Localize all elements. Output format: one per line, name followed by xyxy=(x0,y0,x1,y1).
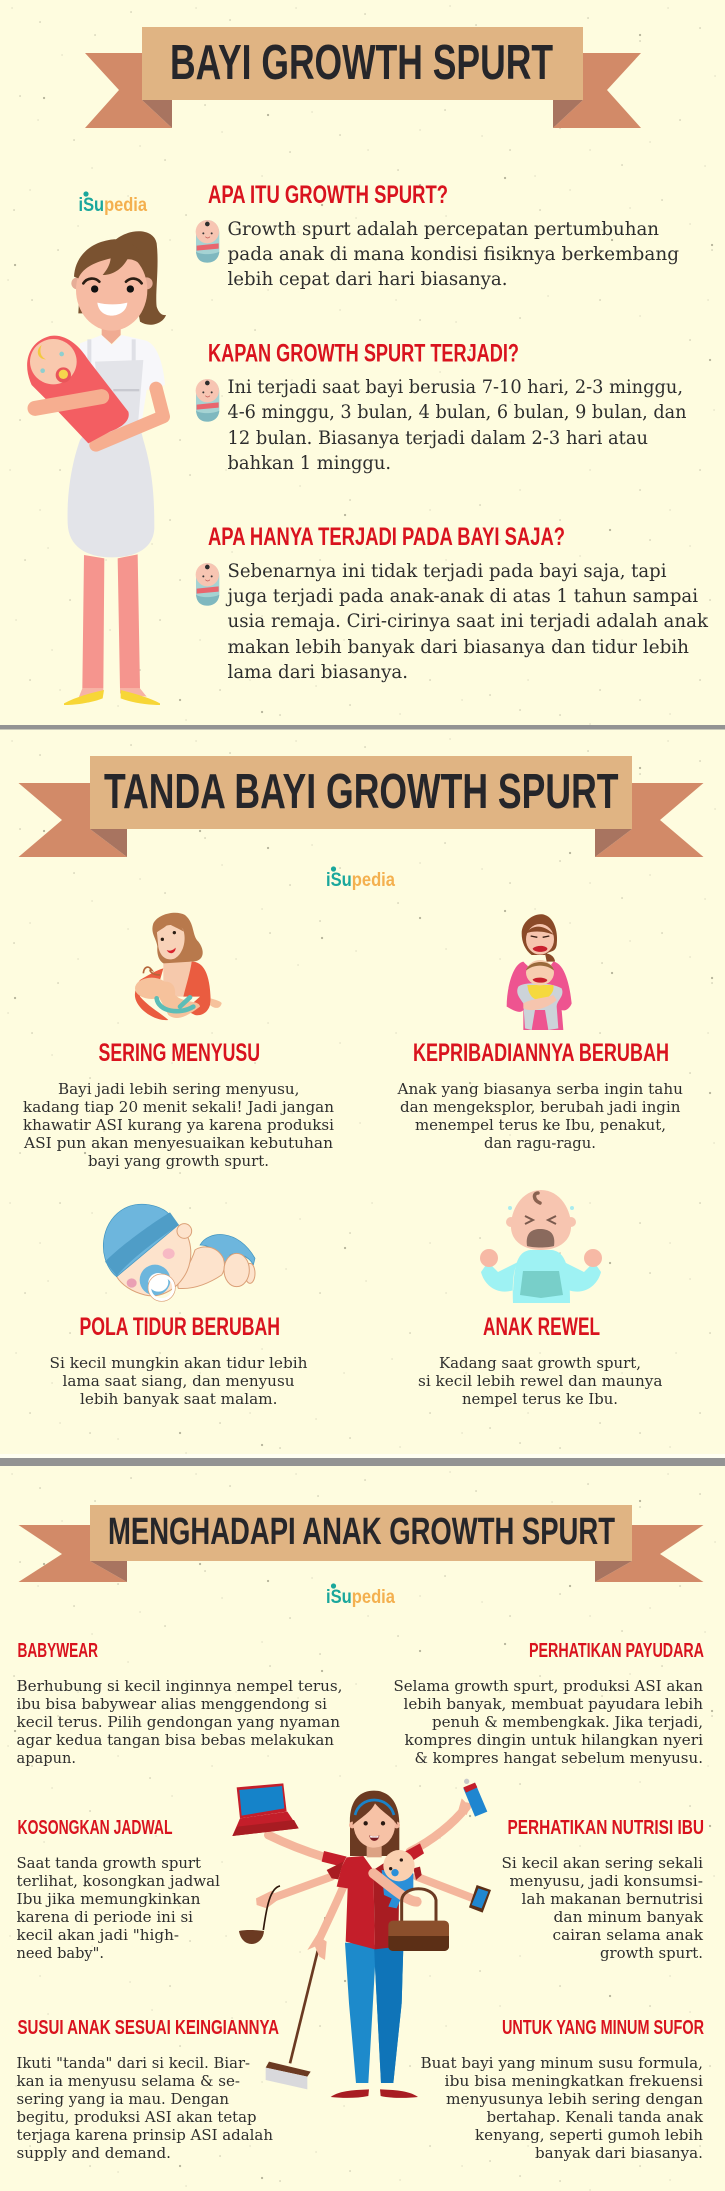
text block: perhatikan payudara: Selama growth spurt, produksi ASI akan xyxy=(394,1677,703,1695)
text block: kosongkan jadwal: karena di periode ini si xyxy=(16,1908,193,1926)
text block: sering menyusu: Bayi jadi lebih sering menyusu, xyxy=(58,1080,300,1098)
text block: babywear: Berhubung si kecil inginnya nempel terus, xyxy=(16,1677,342,1695)
heading: apa itu growth spurt: APA ITU GROWTH SPURT? xyxy=(208,181,448,209)
text block: untuk yang minum sufor: Buat bayi yang minum susu formula, xyxy=(420,2054,703,2072)
text block: perhatikan payudara: kompres dingin untuk hilangkan nyeri xyxy=(404,1731,703,1749)
heading: anak rewel: ANAK REWEL xyxy=(483,1313,600,1341)
text block: when it happens: bahkan 1 minggu. xyxy=(228,452,391,474)
text block: perhatikan nutrisi ibu xyxy=(502,1854,704,1962)
text block: perhatikan nutrisi ibu: Si kecil akan sering sekali xyxy=(502,1854,703,1872)
heading: babywear: BABYWEAR xyxy=(18,1640,98,1662)
heading: sering menyusu: SERING MENYUSU xyxy=(98,1039,260,1067)
text block: not only babies: juga terjadi pada anak-anak di atas 1 tahun sampai xyxy=(226,585,698,607)
text block: pola tidur berubah: lama saat siang, dan menyusu xyxy=(62,1372,295,1390)
text block: anak rewel xyxy=(418,1354,663,1408)
text block: growth spurt definition: pada anak di mana kondisi fisiknya berkembang xyxy=(228,243,679,265)
icon: swaddled baby bullet 3 xyxy=(196,563,219,606)
heading: pola tidur berubah: POLA TIDUR BERUBAH xyxy=(80,1313,280,1341)
text block: growth spurt definition: lebih cepat dari hari biasanya. xyxy=(228,268,508,290)
heading: apa hanya terjadi pada bayi saja: APA HANYA TERJADI PADA BAYI SAJA? xyxy=(208,523,565,551)
text block: susui anak sesuai keinginannya: sering yang ia mau. Dengan xyxy=(16,2090,229,2108)
panel: apa itu growth spurt xyxy=(27,27,708,705)
text block: susui anak sesuai keinginannya: terjaga karena prinsip ASI adalah xyxy=(16,2126,273,2144)
text block: kepribadiannya berubah: dan mengeksplor, berubah jadi ingin xyxy=(400,1098,681,1116)
text block: not only babies: makan lebih banyak dari biasanya dan tidur lebih xyxy=(228,636,689,658)
text block: not only babies xyxy=(226,560,708,683)
text block: not only babies: Sebenarnya ini tidak terjadi pada bayi saja, tapi xyxy=(228,560,666,582)
text block: when it happens: 4-6 minggu, 3 bulan, 4 bulan, 6 bulan, 9 bulan, dan xyxy=(228,401,686,423)
panel: tanda bayi growth spurt xyxy=(18,756,704,1408)
text block: perhatikan nutrisi ibu: dan minum banyak xyxy=(554,1908,704,1926)
heading: kapan growth spurt terjadi: KAPAN GROWTH SPURT TERJADI? xyxy=(208,340,519,368)
heading: kosongkan jadwal: KOSONGKAN JADWAL xyxy=(18,1817,172,1839)
text block: kosongkan jadwal: terlihat, kosongkan jadwal xyxy=(16,1872,220,1890)
text block: susui anak sesuai keinginannya: kan ia menyusu selama & se- xyxy=(16,2072,240,2090)
text block: kosongkan jadwal: Ibu jika memungkinkan xyxy=(16,1890,201,1908)
text block: kosongkan jadwal xyxy=(16,1854,220,1962)
text block: kosongkan jadwal: need baby". xyxy=(16,1944,104,1962)
banner: bayi growth spurt: BAYI GROWTH SPURT xyxy=(170,36,553,90)
illustration: crying baby xyxy=(480,1190,602,1303)
text block: babywear: agar kedua tangan bisa bebas melakukan xyxy=(16,1731,334,1749)
text block: susui anak sesuai keinginannya xyxy=(16,2054,273,2162)
text block: kosongkan jadwal: kecil akan jadi "high- xyxy=(16,1926,179,1944)
text block: anak rewel: si kecil lebih rewel dan maunya xyxy=(418,1372,663,1390)
text block: kepribadiannya berubah: menempel terus ke Ibu, penakut, xyxy=(415,1116,666,1134)
text block: anak rewel: Kadang saat growth spurt, xyxy=(439,1354,641,1372)
text block: perhatikan nutrisi ibu: cairan selama anak xyxy=(552,1926,704,1944)
banner: menghadapi anak growth spurt xyxy=(18,1505,704,1582)
text block: sering menyusu: bayi yang growth spurt. xyxy=(88,1152,269,1170)
text block: not only babies: usia remaja. Ciri-cirinya saat ini terjadi adalah anak xyxy=(228,610,708,632)
text block: babywear: kecil terus. Pilih gendongan yang nyaman xyxy=(16,1713,340,1731)
logo: isupedia: iSupedia xyxy=(326,870,395,891)
text block: sering menyusu: kadang tiap 20 menit sekali! Jadi jangan xyxy=(23,1098,334,1116)
text block: susui anak sesuai keinginannya: supply and demand. xyxy=(16,2144,171,2162)
text block: perhatikan nutrisi ibu: growth spurt. xyxy=(600,1944,703,1962)
text block: growth spurt definition xyxy=(228,218,679,290)
text block: kepribadiannya berubah xyxy=(396,1080,683,1152)
text block: untuk yang minum sufor: bertahap. Kenali tanda anak xyxy=(486,2108,704,2126)
text block: not only babies: lama dari biasanya. xyxy=(228,661,408,683)
text block: untuk yang minum sufor: kenyang, seperti gumoh lebih xyxy=(475,2126,703,2144)
text block: when it happens xyxy=(228,376,686,474)
banner: tanda bayi growth spurt xyxy=(18,756,704,857)
icon: swaddled baby bullet 1 xyxy=(196,220,219,263)
text block: when it happens: 12 bulan. Biasanya terjadi dalam 2-3 hari atau xyxy=(228,427,648,449)
text block: growth spurt definition: Growth spurt adalah percepatan pertumbuhan xyxy=(228,218,659,240)
text block: anak rewel: nempel terus ke Ibu. xyxy=(462,1390,618,1408)
icon: swaddled baby bullet 2 xyxy=(196,379,219,422)
text block: untuk yang minum sufor xyxy=(420,2054,704,2162)
text block: kepribadiannya berubah: dan ragu-ragu. xyxy=(484,1134,596,1152)
text block: kepribadiannya berubah: Anak yang biasanya serba ingin tahu xyxy=(396,1080,683,1098)
text block: pola tidur berubah: Si kecil mungkin akan tidur lebih xyxy=(50,1354,308,1372)
text block: perhatikan payudara: lebih banyak, membuat payudara lebih xyxy=(404,1695,703,1713)
logo: isupedia: iSupedia xyxy=(78,195,147,216)
text block: untuk yang minum sufor: ibu bisa meningkatkan frekuensi xyxy=(444,2072,703,2090)
text block: sering menyusu: ASI pun akan menyesuaikan kebutuhan xyxy=(23,1134,333,1152)
illustration: mother breastfeeding xyxy=(135,913,222,1020)
text block: perhatikan nutrisi ibu: menyusu, jadi konsumsi- xyxy=(510,1872,703,1890)
banner: bayi growth spurt xyxy=(85,27,641,128)
text block: untuk yang minum sufor: banyak dari biasanya. xyxy=(535,2144,703,2162)
text block: sering menyusu xyxy=(23,1080,334,1170)
text block: untuk yang minum sufor: menyusunya lebih sering dengan xyxy=(446,2090,703,2108)
illustration: mother holding swaddled baby xyxy=(27,231,166,705)
text block: perhatikan payudara: & kompres hangat sebelum menyusu. xyxy=(414,1749,703,1767)
text block: babywear xyxy=(16,1677,342,1767)
text block: kosongkan jadwal: Saat tanda growth spurt xyxy=(16,1854,201,1872)
illustration: sleeping baby with pacifier xyxy=(103,1204,255,1301)
logo: isupedia: iSupedia xyxy=(326,1587,395,1608)
text block: babywear: ibu bisa babywear alias menggendong si xyxy=(16,1695,327,1713)
text block: sering menyusu: khawatir ASI kurang ya karena produksi xyxy=(23,1116,334,1134)
text block: perhatikan nutrisi ibu: lah makanan bernutrisi xyxy=(522,1890,703,1908)
illustration: multitasking mother with six arms xyxy=(232,1779,491,2098)
panel: menghadapi anak growth spurt xyxy=(16,1505,704,2162)
text block: babywear: apapun. xyxy=(16,1749,76,1767)
text block: susui anak sesuai keinginannya: begitu, produksi ASI akan tetap xyxy=(16,2108,256,2126)
text block: pola tidur berubah: lebih banyak saat malam. xyxy=(80,1390,278,1408)
text block: perhatikan payudara: penuh & membengkak. Jika terjadi, xyxy=(432,1713,703,1731)
illustration: crying mother holding crying baby xyxy=(507,914,572,1030)
text block: susui anak sesuai keinginannya: Ikuti "tanda" dari si kecil. Biar- xyxy=(16,2054,250,2072)
text block: when it happens: Ini terjadi saat bayi berusia 7-10 hari, 2-3 minggu, xyxy=(228,376,683,398)
text block: pola tidur berubah xyxy=(50,1354,308,1408)
heading: susui anak sesuai keinginannya: SUSUI ANAK SESUAI KEINGIANNYA xyxy=(18,2017,279,2039)
text block: perhatikan payudara xyxy=(394,1677,703,1767)
